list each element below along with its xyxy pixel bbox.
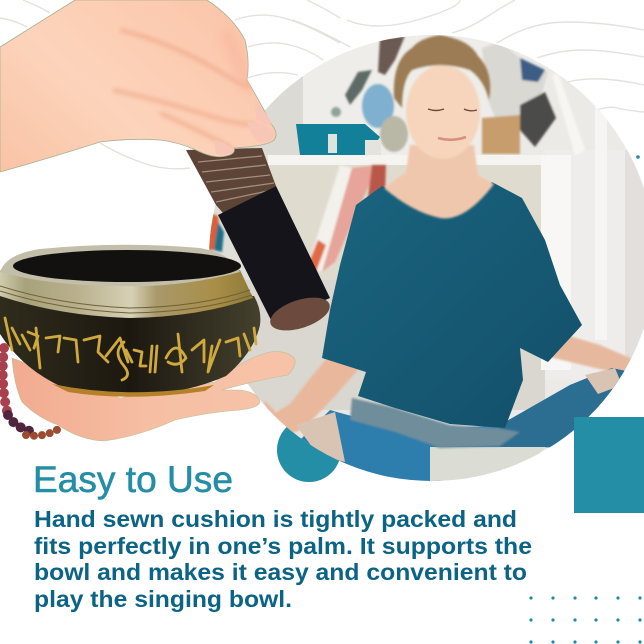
blue sweater [322,182,582,428]
left forearm and open hand [264,359,359,434]
books on shelf [206,165,386,272]
face [406,65,480,159]
room background [205,30,644,490]
finger creases [113,30,256,148]
body paragraph: bowl and makes it easy and convenient to [34,559,527,585]
lower hand holding bowl [12,352,295,441]
grey shirt hem [350,398,520,448]
body paragraph: fits perfectly in one’s palm. It supports the [34,533,532,559]
bead bracelet [3,348,60,436]
photo: woman meditating in round frame [205,30,644,490]
background wave lines [0,0,644,169]
heading: Easy to Use [33,459,233,500]
wrapped wooden handle [186,148,276,213]
dot grid: bottom right [529,596,642,644]
bowl interior [13,250,241,282]
hair [394,35,490,108]
fingernails [214,102,275,155]
gold foot rim [52,384,214,397]
body paragraph: Hand sewn cushion is tightly packed and [34,506,517,532]
teal accent square [574,417,644,513]
bowl body [0,296,260,396]
engraved gold ornament [5,318,256,380]
wall posters [331,36,585,156]
right forearm [551,336,632,373]
body paragraph: play the singing bowl. [34,586,292,612]
singing bowl [0,245,260,397]
outer rim [0,245,240,286]
metal band [0,270,253,318]
teal storage box [296,124,381,155]
ripped jeans and legs [296,368,644,482]
mallet [186,148,334,337]
black cushion [218,186,330,322]
rim groove lines [0,286,252,313]
white shelf board [268,155,548,165]
eyes and mouth [428,109,477,140]
white shelf column [541,155,571,370]
cushion end [266,291,334,337]
body paragraph [34,506,532,612]
dot grid: top right [636,155,640,180]
neck and collarbone [384,145,494,218]
teal accent circle [277,418,341,482]
upper hand holding mallet [0,0,276,172]
